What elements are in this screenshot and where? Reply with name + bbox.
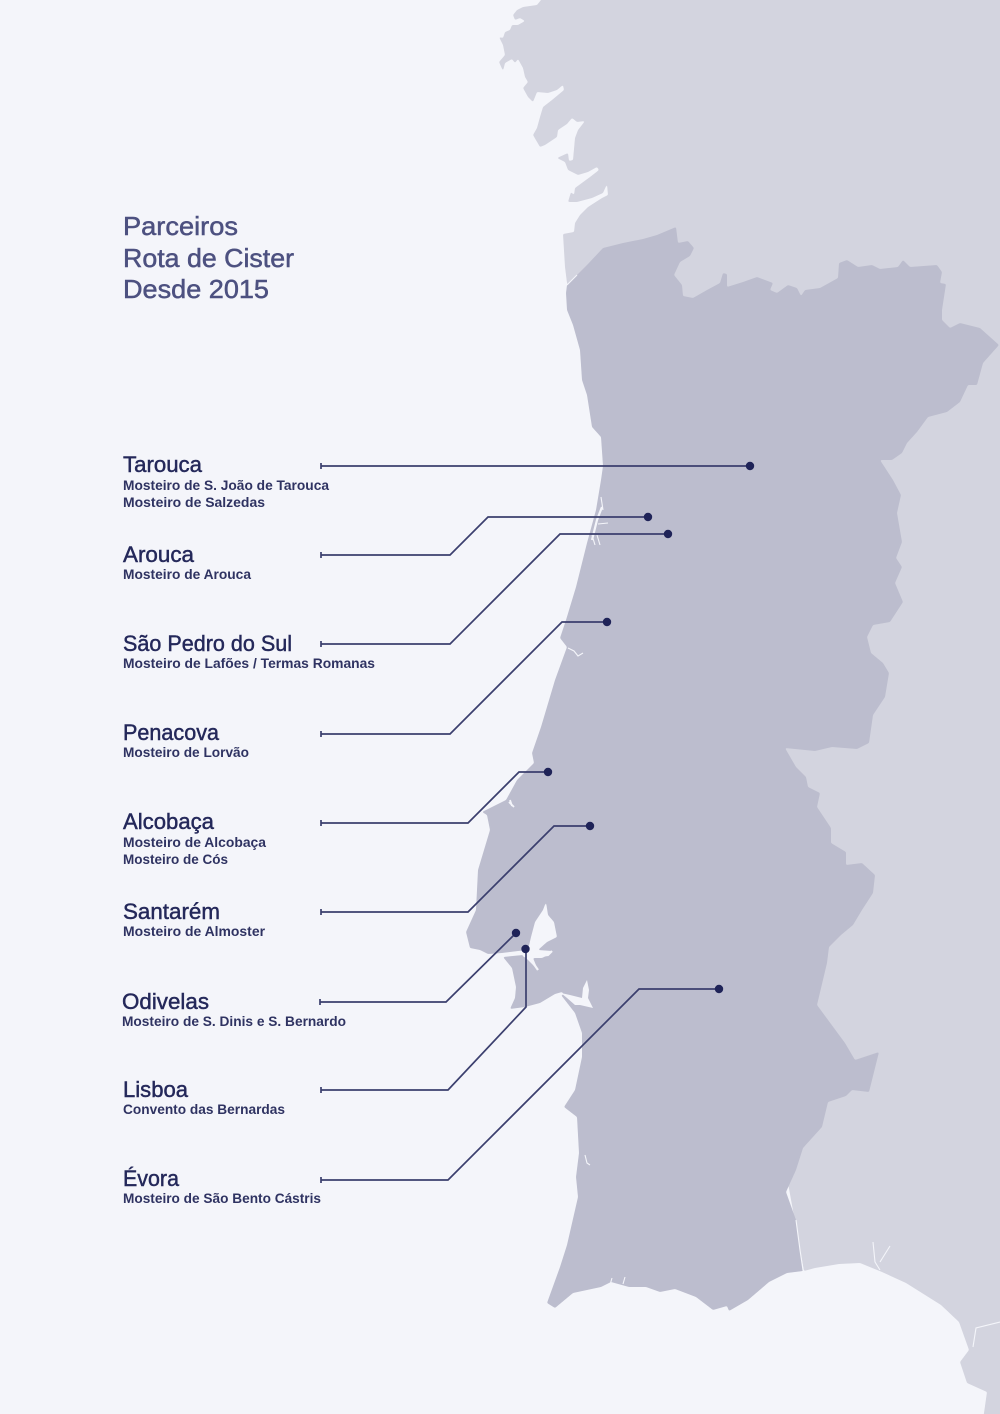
entry: Alcobaça [123, 809, 266, 867]
title: Parceiros [123, 211, 238, 241]
entry: Penacova: Penacova [123, 720, 220, 745]
entry: Santarém: Mosteiro de Almoster [123, 923, 266, 939]
entry: Lisboa: Lisboa [123, 1077, 189, 1102]
title [123, 211, 294, 304]
leader: Alcobaça [321, 768, 552, 826]
entry: Tarouca: Mosteiro de Salzedas [123, 494, 265, 510]
entry: Évora: Mosteiro de São Bento Cástris [123, 1190, 321, 1206]
map: Spain [499, 0, 1000, 1414]
entry: Évora [123, 1166, 321, 1206]
leader: Lisboa [321, 945, 530, 1093]
entry: São Pedro do Sul: Mosteiro de Lafões / Termas Romanas [123, 655, 375, 671]
leader: Évora [321, 985, 723, 1183]
entry: Alcobaça: Alcobaça [123, 809, 215, 834]
entry: São Pedro do Sul [123, 631, 375, 671]
entry: Alcobaça: Mosteiro de Alcobaça [123, 834, 266, 850]
entry: Odivelas: Odivelas [122, 989, 209, 1014]
leader: Santarém [321, 822, 594, 915]
entry: Alcobaça: Mosteiro de Cós [123, 851, 228, 867]
leader: Odivelas [320, 929, 520, 1005]
entry: Lisboa [123, 1077, 285, 1117]
map: estuaries and river details [509, 275, 1000, 1347]
entry: São Pedro do Sul: São Pedro do Sul [123, 631, 292, 656]
title: Desde 2015 [123, 274, 269, 304]
entry: Odivelas [122, 989, 346, 1029]
title: Rota de Cister [123, 243, 294, 273]
leader: Arouca [321, 513, 652, 558]
entry: Arouca [123, 542, 251, 582]
leader: Penacova [321, 618, 611, 737]
leader: São Pedro do Sul [321, 530, 672, 647]
entry: Penacova: Mosteiro de Lorvão [123, 744, 249, 760]
entry: Odivelas: Mosteiro de S. Dinis e S. Bernardo [122, 1013, 346, 1029]
entry: Lisboa: Convento das Bernardas [123, 1101, 285, 1117]
entry: Arouca: Mosteiro de Arouca [123, 566, 251, 582]
leader: Tarouca [321, 462, 754, 470]
entry: Santarém: Santarém [123, 899, 220, 924]
entry: Arouca: Arouca [123, 542, 195, 567]
entry: Tarouca: Mosteiro de S. João de Tarouca [123, 477, 329, 493]
entry: Évora: Évora [123, 1166, 180, 1191]
map of the Iberian west [466, 0, 1000, 1414]
entry: Tarouca: Tarouca [123, 452, 203, 477]
map: Portugal [466, 227, 999, 1311]
entry: Tarouca [123, 452, 329, 510]
entry: Penacova [123, 720, 249, 760]
entry: Santarém [123, 899, 266, 939]
